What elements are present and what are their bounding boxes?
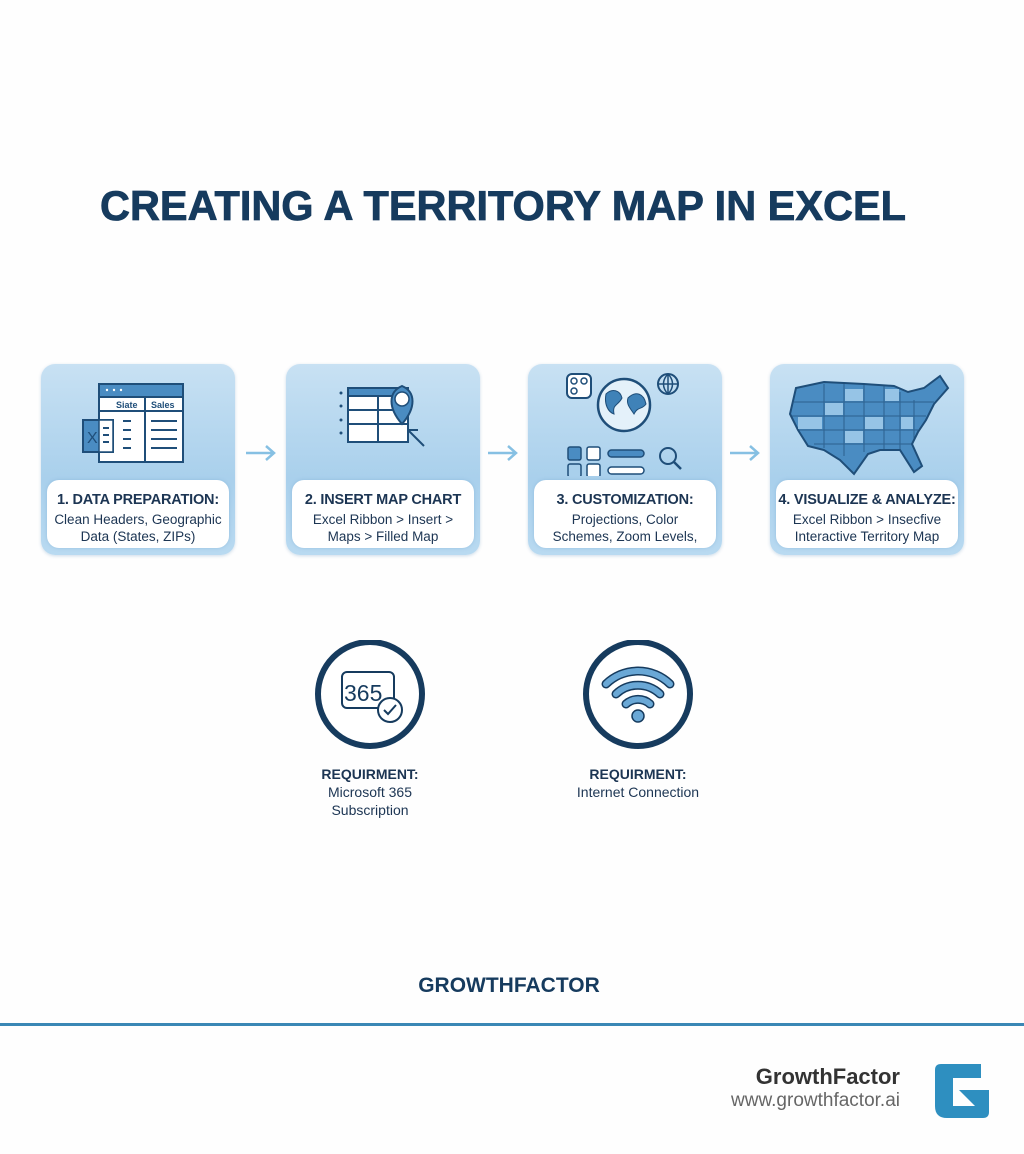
icon: 365 circle xyxy=(315,640,425,749)
panel: step 2 insert map chart xyxy=(286,364,480,555)
arrow 1 xyxy=(246,445,276,461)
label: step 2: Maps > Filled Map xyxy=(328,529,438,544)
requirement: Microsoft 365 xyxy=(315,640,425,818)
text: requirement 2 xyxy=(577,766,699,800)
text: requirement 2: REQUIRMENT: xyxy=(589,766,687,782)
label: step 2 xyxy=(292,480,474,548)
label: step 2: 2. INSERT MAP CHART xyxy=(305,492,461,508)
brand text: GROWTHFACTOR xyxy=(418,974,600,997)
icon: spreadsheet: X xyxy=(87,430,98,447)
label: step 4: Excel Ribbon > Insecfive xyxy=(793,512,941,527)
logo xyxy=(935,1064,989,1118)
text: requirement 1: Subscription xyxy=(331,802,409,818)
label: step 1: 1. DATA PREPARATION: xyxy=(57,492,219,508)
text: requirement 1: Microsoft 365 xyxy=(328,784,412,800)
icon: wifi circle xyxy=(583,640,693,749)
icon: 365 circle: 365 xyxy=(344,680,382,706)
label: step 4 xyxy=(776,480,958,548)
icon: globe and settings xyxy=(566,373,682,476)
label: step 4: 4. VISUALIZE & ANALYZE: xyxy=(778,492,956,508)
icon: table with map pin xyxy=(340,384,425,447)
label: step 3: Schemes, Zoom Levels, xyxy=(553,529,697,544)
footer brand: GrowthFactor xyxy=(756,1064,900,1089)
arrow 3 xyxy=(730,445,760,461)
icon: spreadsheet: Siate xyxy=(116,400,138,410)
label: step 1: Clean Headers, Geographic xyxy=(54,512,222,527)
label: step 1 xyxy=(47,480,229,548)
arrow 2 xyxy=(488,445,518,461)
icon: spreadsheet: Sales xyxy=(151,400,175,410)
label: step 3: 3. CUSTOMIZATION: xyxy=(556,492,694,508)
panel: step 3 customization xyxy=(528,364,722,555)
requirement: internet xyxy=(577,640,699,800)
panel: step 1 data preparation xyxy=(41,364,235,555)
label: step 4: Interactive Territory Map xyxy=(795,529,939,544)
label: step 3 xyxy=(534,480,716,548)
label: step 3: Projections, Color xyxy=(572,512,678,527)
icon: US map xyxy=(789,374,950,476)
label: step 2: Excel Ribbon > Insert > xyxy=(313,512,453,527)
footer brand xyxy=(731,1064,900,1111)
text: requirement 1 xyxy=(321,766,419,818)
icon: spreadsheet xyxy=(82,383,184,463)
footer brand: www.growthfactor.ai xyxy=(731,1090,900,1111)
title: CREATING A TERRITORY MAP IN EXCEL xyxy=(100,182,906,229)
panel: step 4 visualize xyxy=(770,364,964,555)
label: step 1: Data (States, ZIPs) xyxy=(81,529,195,544)
text: requirement 1: REQUIRMENT: xyxy=(321,766,419,782)
text: requirement 2: Internet Connection xyxy=(577,784,699,800)
